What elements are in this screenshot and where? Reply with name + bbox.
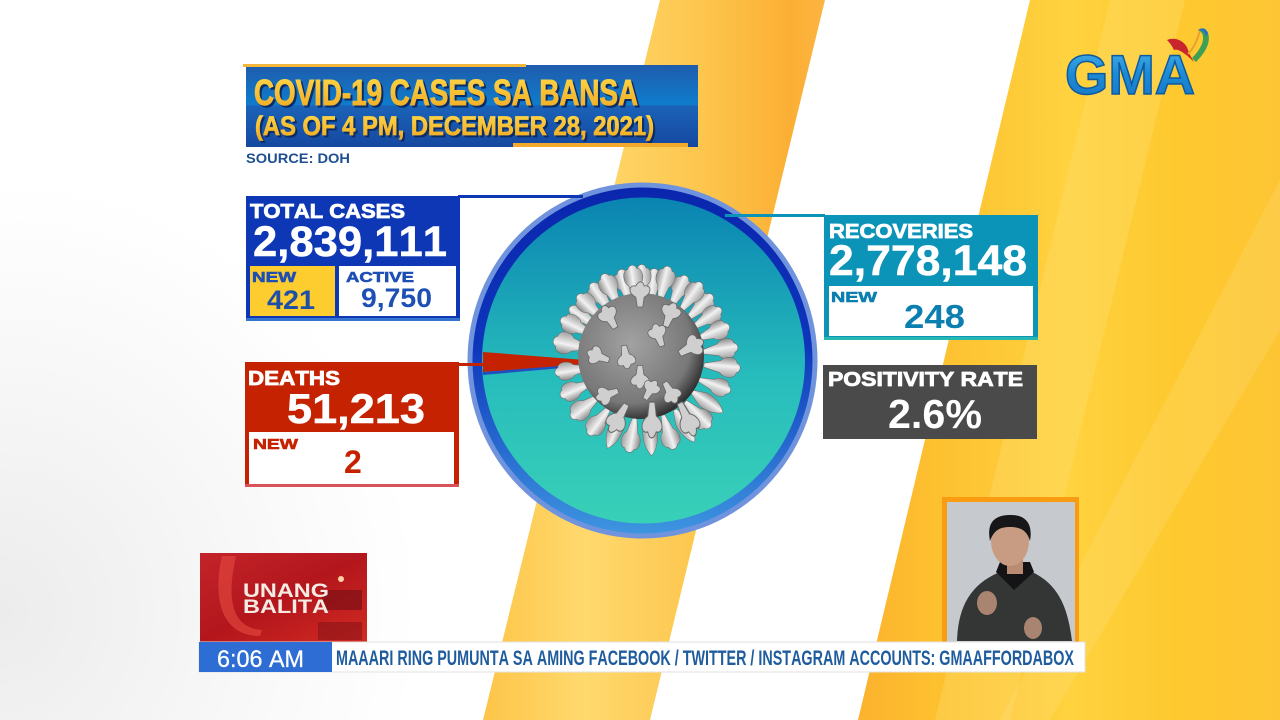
interpreter head bbox=[991, 516, 1029, 566]
panel: positivity rate bbox=[823, 365, 1037, 439]
interpreter hands bbox=[977, 591, 997, 615]
deaths wedge bbox=[483, 352, 585, 372]
show title bbox=[243, 581, 329, 618]
new cases box: NEW bbox=[252, 269, 297, 286]
new cases box bbox=[250, 266, 335, 316]
new deaths box: 2 bbox=[344, 444, 362, 480]
clock bbox=[199, 642, 332, 673]
interpreter body bbox=[957, 572, 1072, 641]
title line 2: (AS OF 4 PM, DECEMBER 28, 2021) bbox=[255, 111, 654, 141]
active cases box: ACTIVE bbox=[346, 269, 414, 286]
deaths label: DEATHS bbox=[248, 368, 340, 390]
heart swoosh bbox=[1167, 28, 1209, 62]
active cases box: 9,750 bbox=[361, 283, 432, 313]
ticker bar bbox=[199, 642, 1085, 673]
clock: 6:06 AM bbox=[217, 646, 304, 673]
yellow stripe: right bbox=[858, 0, 1280, 720]
title line 2: (AS OF 4 PM, DECEMBER 28, 2021) bbox=[257, 113, 656, 143]
total cases label: TOTAL CASES bbox=[250, 201, 405, 223]
GMA wordmark: GMA bbox=[1065, 43, 1195, 106]
active cases box bbox=[339, 266, 456, 316]
GMA logo bbox=[1065, 28, 1209, 106]
positivity label: POSITIVITY RATE bbox=[828, 369, 1023, 391]
source: SOURCE: DOH bbox=[246, 150, 350, 166]
yellow stripe: center bbox=[483, 0, 825, 720]
show title: UNANG bbox=[243, 581, 329, 602]
panel: deaths bbox=[245, 362, 484, 487]
deaths value: 51,213 bbox=[287, 385, 425, 432]
panel: total cases bbox=[246, 195, 583, 321]
new recoveries box bbox=[829, 286, 1033, 336]
show logo: unang balita bbox=[200, 553, 367, 642]
new deaths box bbox=[249, 432, 454, 484]
title line 1: COVID-19 CASES SA BANSA bbox=[256, 74, 640, 115]
show title: BALITA bbox=[243, 597, 329, 618]
title banner bbox=[243, 64, 698, 147]
virus bbox=[551, 264, 741, 456]
new recoveries box: NEW bbox=[831, 289, 878, 306]
panel: recoveries bbox=[725, 214, 1038, 340]
pie circle bbox=[468, 182, 818, 538]
title line 1: COVID-19 CASES SA BANSA bbox=[254, 72, 638, 113]
positivity value: 2.6% bbox=[888, 391, 982, 437]
sign language interpreter bbox=[942, 497, 1079, 643]
recoveries value: 2,778,148 bbox=[829, 237, 1027, 285]
recoveries label: RECOVERIES bbox=[829, 221, 973, 243]
new cases box: 421 bbox=[267, 285, 315, 315]
new deaths box: NEW bbox=[253, 436, 299, 453]
new recoveries box: 248 bbox=[904, 298, 965, 335]
total cases value: 2,839,111 bbox=[253, 218, 447, 266]
